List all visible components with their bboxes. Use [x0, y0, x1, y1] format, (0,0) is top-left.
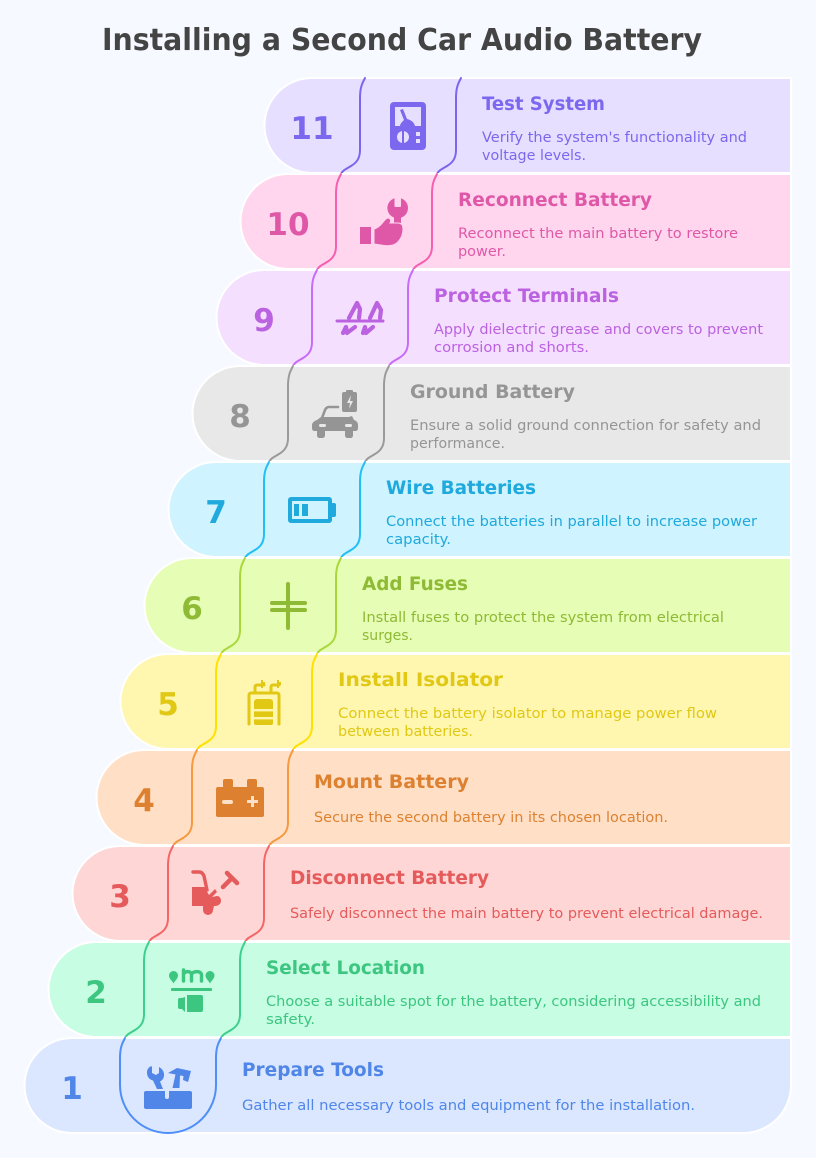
- heading: Add Fuses: Add Fuses: [362, 573, 468, 595]
- description: Test System: voltage levels.: [482, 148, 586, 164]
- description: Reconnect Battery: Reconnect the main battery to restore: [458, 226, 738, 242]
- heading: Protect Terminals: Protect Terminals: [434, 285, 619, 307]
- step 10: Reconnect Battery: [240, 174, 791, 270]
- step 7: Wire Batteries: [168, 462, 791, 558]
- title: Installing a Second Car Audio Battery: [102, 23, 702, 58]
- icon: terminals: [337, 303, 383, 333]
- heading: Select Location: Select Location: [266, 957, 425, 979]
- description: Add Fuses: surges.: [362, 628, 413, 644]
- heading: Test System: Test System: [482, 93, 605, 115]
- number 10: 10: [266, 207, 310, 243]
- icon: battery isolator: [249, 680, 281, 725]
- icon: fuse symbol: [272, 584, 305, 628]
- icon: battery level: [288, 497, 336, 523]
- description: Wire Batteries: capacity.: [386, 532, 451, 548]
- heading: Disconnect Battery: Disconnect Battery: [290, 867, 490, 889]
- number 6: 6: [181, 591, 203, 627]
- step 9: Protect Terminals: [217, 270, 791, 366]
- number 11: 11: [290, 111, 334, 147]
- number 3: 3: [109, 879, 131, 915]
- description: Ground Battery: performance.: [410, 436, 505, 452]
- step 2: Select Location: [49, 942, 791, 1038]
- description: Protect Terminals: corrosion and shorts.: [434, 340, 589, 356]
- heading: Install Isolator: Install Isolator: [338, 669, 504, 691]
- description: Select Location: Choose a suitable spot for the battery, considering accessibility and: [266, 994, 761, 1010]
- step 3: Disconnect Battery: [73, 846, 791, 942]
- heading: Ground Battery: Ground Battery: [410, 381, 576, 403]
- number 9: 9: [253, 303, 275, 339]
- description: Reconnect Battery: power.: [458, 244, 506, 260]
- number 1: 1: [61, 1071, 83, 1107]
- number 7: 7: [205, 495, 227, 531]
- step 5: Install Isolator: [121, 654, 791, 750]
- description: Protect Terminals: Apply dielectric grease and covers to prevent: [434, 322, 763, 338]
- heading: Reconnect Battery: Reconnect Battery: [458, 189, 653, 211]
- number 4: 4: [133, 783, 155, 819]
- icon: disconnected battery clamp: [192, 872, 237, 915]
- icon: toolbox: [144, 1066, 192, 1109]
- description: Select Location: safety.: [266, 1012, 315, 1028]
- heading: Prepare Tools: Prepare Tools: [242, 1059, 384, 1081]
- step 4: Mount Battery: [96, 750, 791, 846]
- description: Install Isolator: between batteries.: [338, 724, 473, 740]
- description: Disconnect Battery: Safely disconnect the main battery to prevent electrical damage.: [290, 906, 763, 922]
- description: Add Fuses: Install fuses to protect the system from electrical: [362, 610, 724, 626]
- heading: Wire Batteries: Wire Batteries: [386, 477, 536, 499]
- number 2: 2: [85, 975, 107, 1011]
- description: Install Isolator: Connect the battery isolator to manage power flow: [338, 706, 717, 722]
- icon: electric car: [312, 390, 358, 438]
- icon: car battery: [216, 779, 264, 817]
- description: Prepare Tools: Gather all necessary tools and equipment for the installation.: [242, 1098, 695, 1114]
- heading: Mount Battery: Mount Battery: [314, 771, 470, 793]
- icon: location and battery: [169, 970, 214, 1012]
- step 1: Prepare Tools: [25, 1038, 791, 1133]
- description: Wire Batteries: Connect the batteries in parallel to increase power: [386, 514, 757, 530]
- icon: thumb and wrench: [360, 197, 408, 246]
- number 8: 8: [229, 399, 251, 435]
- description: Mount Battery: Secure the second battery in its chosen location.: [314, 810, 668, 826]
- step 8: Ground Battery: [193, 366, 791, 462]
- number 5: 5: [157, 687, 179, 723]
- icon: multimeter: [390, 102, 426, 150]
- description: Test System: Verify the system's functionality and: [482, 130, 747, 146]
- step 11: Test System: [264, 78, 791, 174]
- description: Ground Battery: Ensure a solid ground connection for safety and: [410, 418, 761, 434]
- step 6: Add Fuses: [145, 558, 791, 654]
